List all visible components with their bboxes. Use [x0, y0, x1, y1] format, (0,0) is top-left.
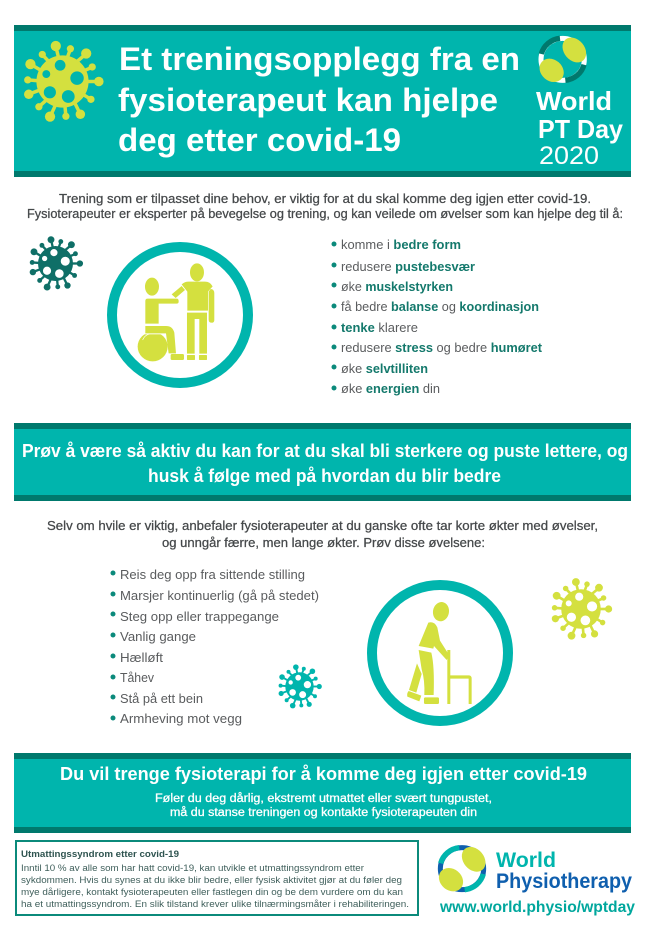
list: benefits of training: komme i bedre form: [341, 238, 461, 252]
icon: teal virus: [279, 664, 322, 708]
list: benefits of training: redusere stress og bedre humøret: [341, 341, 543, 355]
text block: exercise advice: og unngår færre, men lange økter. Prøv disse øvelsene:: [162, 536, 485, 550]
panel: warning banner: Du vil trenge fysioterapi for å komme deg igjen etter covid-19: [60, 764, 587, 784]
panel: post-viral fatigue note: mye dårligere, kontakt fysioterapeuten eller fastlegen din og be dem vurdere om du kan: [21, 887, 403, 898]
panel: activity message banner: Prøv å være så aktiv du kan for at du skal bli sterkere og puste lettere, og: [22, 441, 628, 461]
panel: post-viral fatigue note: Inntil 10 % av alle som har hatt covid-19, kan utvikle et utmattingssyndrom etter: [21, 863, 365, 874]
panel: post-viral fatigue note: sykdommen. Hvis du synes at du ikke blir bedre, eller fysisk aktivitet gjør at du føler deg: [21, 875, 402, 886]
list: benefits of training: øke selvtilliten: [341, 362, 428, 376]
panel: header banner: [14, 25, 631, 177]
panel: warning banner: må du stanse treningen og kontakte fysioterapeuten din: [170, 807, 477, 819]
logo: World Physiotherapy: World: [496, 849, 556, 872]
logo: World Physiotherapy: [434, 842, 635, 916]
bullet dots: [332, 242, 336, 390]
panel: post-viral fatigue note: ha et utmattingssyndrom. En slik tilstand krever ulike tilnærmingsmåter i rehabiliteringen.: [21, 899, 409, 910]
list: exercises: Reis deg opp fra sittende stilling: [120, 568, 305, 582]
title: fysioterapeut kan hjelpe: [118, 82, 498, 118]
icon: yellow virus: [24, 41, 104, 122]
logo: World PT Day 2020: PT Day: [538, 114, 624, 144]
title: deg etter covid-19: [118, 122, 401, 158]
panel: activity message banner: [14, 423, 631, 501]
list: exercises: Steg opp eller trappegange: [120, 610, 279, 624]
logo: World PT Day 2020: World: [536, 86, 612, 116]
list: exercises: Tåhev: [120, 671, 155, 685]
list: exercises: Armheving mot vegg: [120, 712, 242, 726]
icon: dark green virus: [30, 236, 83, 291]
list: benefits of training: [332, 238, 543, 396]
list: benefits of training: få bedre balanse og koordinasjon: [341, 300, 539, 314]
title: [118, 41, 520, 158]
text block: introduction: Trening som er tilpasset dine behov, er viktig for at du skal komme deg igjen etter covid-19.: [59, 192, 591, 206]
title: Et treningsopplegg fra en: [119, 41, 520, 77]
list: exercises: [110, 568, 319, 726]
text block: exercise advice: [47, 519, 598, 550]
logo: World PT Day 2020: 2020: [539, 142, 599, 170]
panel: warning banner: [14, 753, 631, 833]
list: exercises: Stå på ett bein: [120, 692, 203, 706]
text block: exercise advice: Selv om hvile er viktig, anbefaler fysioterapeuter at du ganske ofte tar korte økter med øvelser,: [47, 519, 598, 533]
text block: introduction: [27, 192, 623, 221]
icon: physiotherapist with patient on ball: [112, 247, 248, 383]
list: benefits of training: øke energien din: [341, 382, 440, 396]
logo: World Physiotherapy: www.world.physio/wptday: [439, 899, 635, 916]
panel: post-viral fatigue note: Utmattingssyndrom etter covid-19: [21, 849, 179, 860]
list: benefits of training: redusere pustebesvær: [341, 260, 475, 274]
panel: post-viral fatigue note: [16, 841, 418, 915]
icon: light yellow virus: [552, 578, 612, 640]
logo: World PT Day 2020: [535, 33, 624, 170]
list: benefits of training: øke muskelstyrken: [341, 280, 453, 294]
list: exercises: Hælløft: [120, 651, 164, 665]
icon: person walking with frame: [372, 585, 508, 721]
list: exercises: Marsjer kontinuerlig (gå på stedet): [120, 589, 319, 603]
list: benefits of training: tenke klarere: [341, 321, 418, 335]
bullet dots: [110, 570, 116, 720]
list: exercises: Vanlig gange: [120, 630, 196, 644]
text block: introduction: Fysioterapeuter er eksperter på bevegelse og trening, og kan veilede om øvelser som kan hjelpe deg til å:: [27, 207, 623, 221]
panel: warning banner: Føler du deg dårlig, ekstremt utmattet eller svært tungpustet,: [155, 793, 492, 805]
logo: World Physiotherapy: Physiotherapy: [496, 870, 632, 893]
panel: activity message banner: husk å følge med på hvordan du blir bedre: [148, 466, 501, 486]
